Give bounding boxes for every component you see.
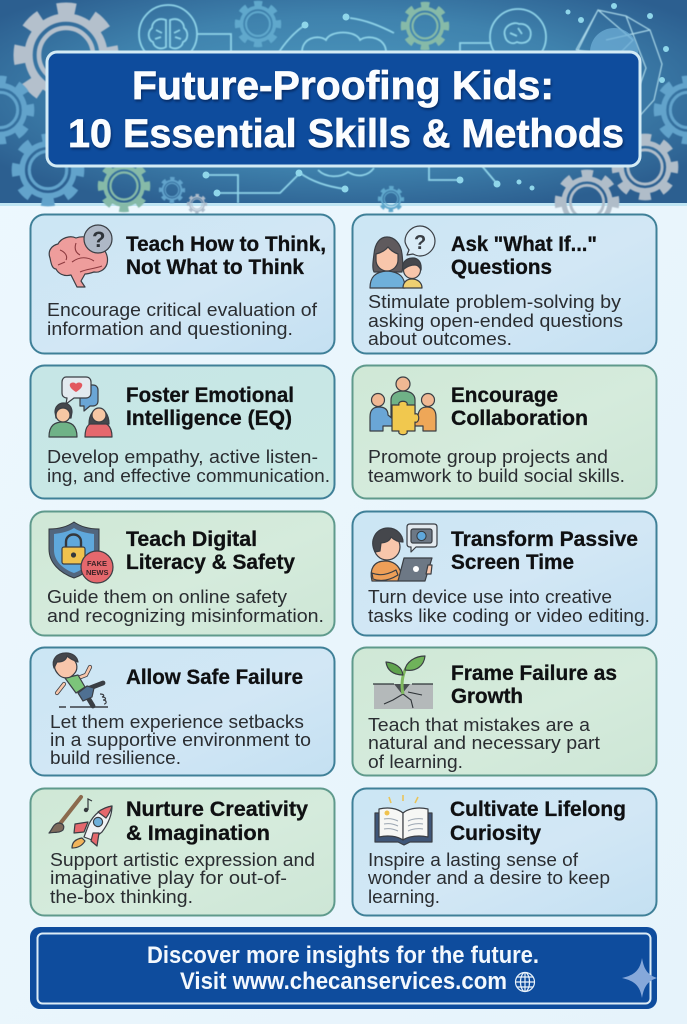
icon: shield, lock and fake news badge: FAKE [87, 559, 107, 568]
panel: frame failure as growth [352, 648, 656, 776]
description [367, 849, 610, 907]
panel: foster emotional intelligence [30, 366, 334, 498]
heading: Literacy & Safety [126, 550, 295, 574]
panel: allow safe failure [30, 648, 334, 776]
description: Support artistic expression and [50, 849, 315, 870]
panel: transform passive screen time [352, 512, 656, 636]
heading: Ask "What If..." [451, 232, 597, 256]
heading: Allow Safe Failure [126, 665, 303, 689]
icon: two people with heart bubbles [49, 377, 112, 437]
description: tasks like coding or video editing. [368, 605, 650, 626]
description: the-box thinking. [50, 886, 193, 907]
icon: child with tablet and camera bubble [371, 524, 437, 581]
heading [451, 661, 617, 708]
description: in a supportive environment to [50, 729, 311, 750]
footer call to action [30, 927, 657, 1009]
heading [126, 232, 326, 279]
heading [451, 232, 597, 279]
panel: ask what if questions [352, 214, 656, 354]
description: asking open-ended questions [368, 310, 623, 331]
heading: Screen Time [451, 550, 574, 574]
description: Let them experience setbacks [50, 711, 304, 732]
heading: Questions [451, 255, 552, 279]
header banner with technology background [0, 0, 687, 230]
description [50, 849, 315, 907]
heading [451, 383, 588, 430]
icon: open book with sparkles [375, 795, 432, 845]
heading: Transform Passive [451, 527, 638, 551]
heading: Not What to Think [126, 255, 304, 279]
description: information and questioning. [47, 318, 293, 339]
heading: Collaboration [451, 406, 588, 430]
footer text: Visit www.checanservices.com [180, 968, 507, 995]
icon: three people with puzzle piece [370, 377, 436, 435]
subtitle text: 10 Essential Skills & Methods [68, 112, 624, 156]
panel: encourage collaboration [352, 366, 656, 498]
description: build resilience. [50, 747, 181, 768]
heading: Frame Failure as [451, 661, 617, 685]
icon: parent and child with question bubble: ? [414, 232, 426, 254]
description: ing, and effective communication. [47, 465, 330, 486]
title panel [47, 52, 640, 166]
heading: Teach How to Think, [126, 232, 326, 256]
description: Guide them on online safety [47, 586, 288, 607]
description: teamwork to build social skills. [368, 465, 625, 486]
icon: parent and child with question bubble [370, 226, 435, 288]
heading [126, 797, 308, 845]
description: Stimulate problem-solving by [368, 291, 622, 312]
heading: Cultivate Lifelong [450, 797, 626, 821]
heading: Intelligence (EQ) [126, 406, 292, 430]
description: imaginative play for out-of- [50, 867, 287, 888]
description: wonder and a desire to keep [367, 867, 610, 888]
icon: shield, lock and fake news badge: NEWS [86, 568, 108, 577]
description: about outcomes. [368, 328, 512, 349]
description: Develop empathy, active listen- [47, 446, 318, 467]
heading [451, 527, 638, 574]
icon: brain with question mark [49, 225, 112, 287]
icon: child slipping and falling [53, 653, 108, 707]
footer text [147, 942, 539, 995]
panel: lifelong curiosity [352, 788, 656, 916]
footer text: Discover more insights for the future. [147, 942, 539, 969]
heading: Nurture Creativity [126, 797, 308, 821]
title text: Future-Proofing Kids: [132, 64, 554, 108]
heading: Teach Digital [126, 527, 257, 551]
heading [126, 383, 294, 430]
description: Encourage critical evaluation of [47, 299, 318, 320]
icon: paintbrush, music note and rocket [49, 797, 112, 848]
description [50, 711, 311, 768]
heading: Growth [451, 684, 523, 708]
description [47, 586, 324, 626]
description [47, 299, 318, 339]
icon: sprout in cracked ground [373, 656, 433, 709]
description [368, 714, 600, 772]
heading: Curiosity [450, 821, 541, 845]
description [47, 446, 330, 486]
icon: globe [516, 972, 534, 992]
panel: nurture creativity [30, 788, 334, 916]
heading: Foster Emotional [126, 383, 294, 407]
icon: shield, lock and fake news badge [49, 522, 113, 583]
heading: Encourage [451, 383, 558, 407]
description: Promote group projects and [368, 446, 608, 467]
heading: & Imagination [126, 821, 270, 845]
description: Inspire a lasting sense of [368, 849, 579, 870]
description [368, 446, 625, 486]
description: learning. [368, 886, 440, 907]
heading [126, 527, 295, 574]
network globe [202, 3, 669, 196]
circuit lines and brain outlines [139, 5, 662, 203]
description: and recognizing misinformation. [47, 605, 324, 626]
description [368, 586, 650, 626]
panel: teach how to think [30, 214, 334, 354]
heading [450, 797, 626, 845]
description: of learning. [368, 751, 463, 772]
icon: gears [0, 4, 687, 230]
icon: sparkle [622, 958, 657, 998]
icon: brain with question mark: ? [92, 227, 105, 252]
description [368, 291, 623, 349]
description: Teach that mistakes are a [368, 714, 591, 735]
description: natural and necessary part [368, 732, 600, 753]
description: Turn device use into creative [368, 586, 612, 607]
panel: digital literacy and safety [30, 512, 334, 636]
